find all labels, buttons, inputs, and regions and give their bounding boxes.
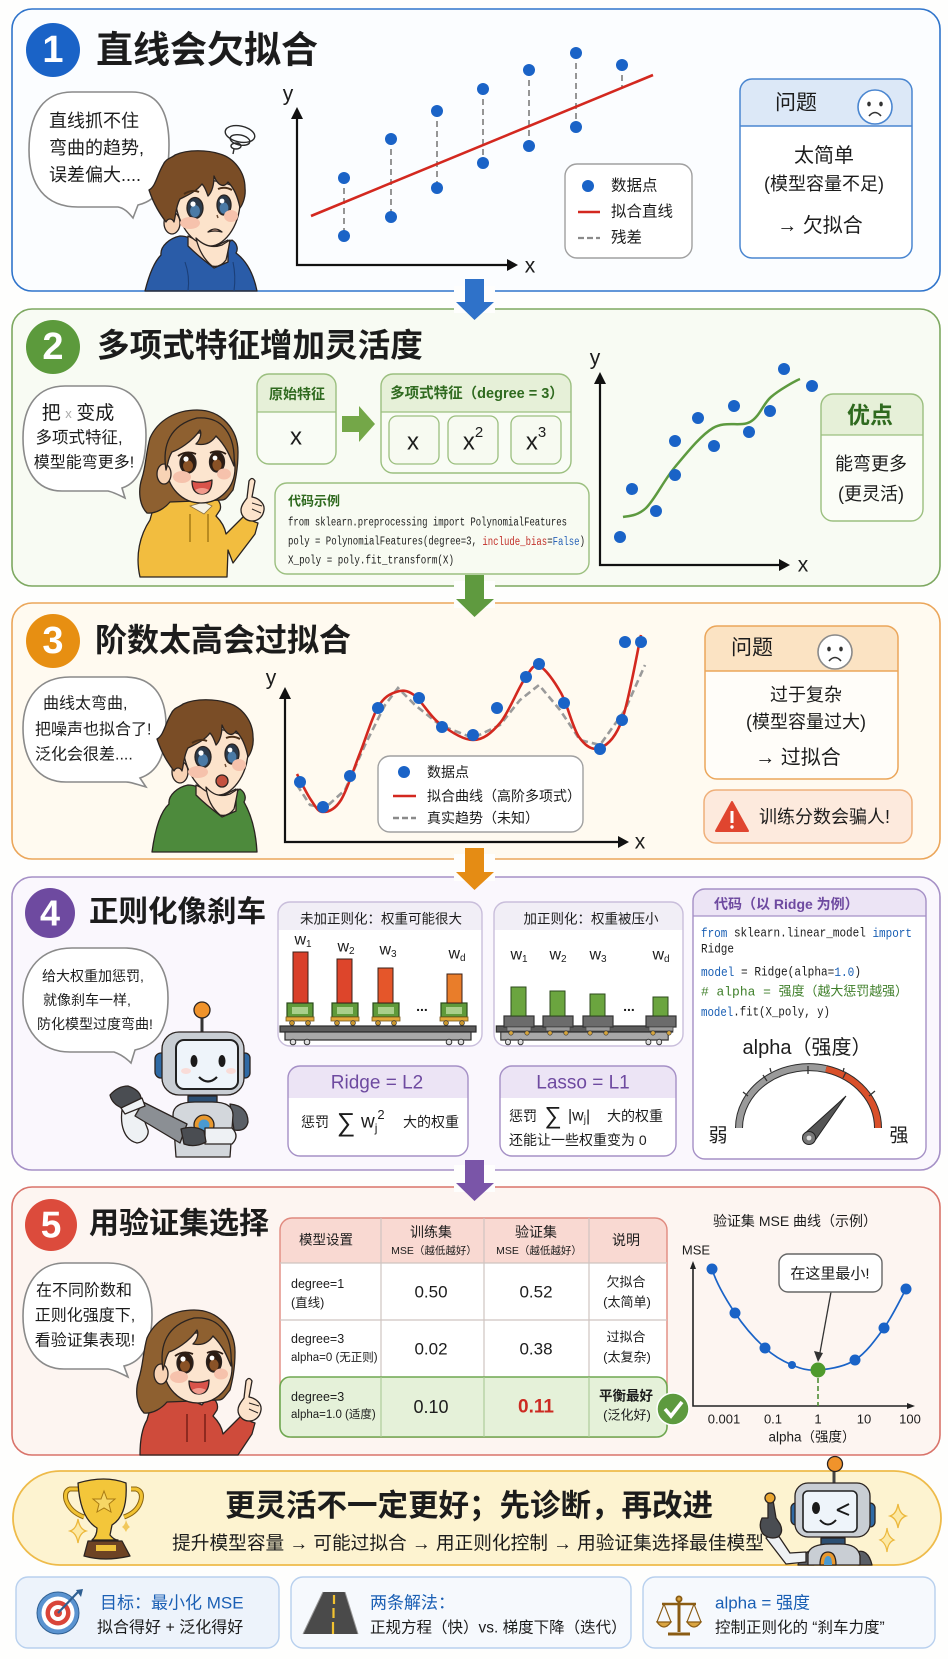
character: girl in red hoodie (137, 1310, 261, 1455)
overfit curve plot (266, 635, 647, 854)
arrow: panel 4 to 5 (454, 1160, 495, 1201)
comparison table: degree=1 (291, 1277, 344, 1291)
speech bubble 2: 把 x 变成 (42, 402, 114, 424)
overfit curve plot: y (266, 666, 277, 690)
icon: check mark (657, 1393, 689, 1425)
panel 4: regularization as a brake (12, 877, 940, 1170)
problem card 3: → 过拟合 (755, 746, 841, 769)
box: with regularization: 2 (561, 954, 567, 964)
speech bubble 3: 泛化会很差.... (35, 746, 133, 764)
speech bubble 1: 误差偏大.... (49, 165, 141, 185)
card: Ridge L2: 2 (377, 1106, 385, 1122)
MSE curve chart: MSE (682, 1242, 710, 1258)
badge 1: 1 (42, 29, 64, 71)
box: without regularization: ... (416, 998, 428, 1014)
benefit card: (更灵活) (838, 484, 904, 504)
card: Lasso L1: |w (568, 1108, 584, 1124)
card: Lasso L1 (500, 1066, 676, 1156)
badge 1 (26, 23, 80, 77)
badge 3 (26, 614, 80, 668)
card: goal: 拟合得好 + 泛化得好 (97, 1618, 243, 1636)
speech bubble 4: 给大权重加惩罚, (42, 968, 144, 984)
card: two solutions: 正规方程（快）vs. 梯度下降（迭代） (370, 1618, 627, 1636)
icon: trophy (66, 1479, 141, 1559)
problem card 3: (模型容量过大) (746, 712, 866, 732)
problem card 1 (740, 79, 912, 258)
box: polynomial features: 多项式特征（degree = 3） (390, 384, 564, 402)
comparison table: (直线) (291, 1296, 324, 1310)
box: with regularization: w (549, 946, 561, 964)
comparison table: 欠拟合 (606, 1274, 646, 1290)
warning callout (704, 790, 912, 843)
legend 1: 拟合直线 (611, 202, 673, 220)
comparison table: 0.52 (519, 1282, 553, 1302)
card: Ridge L2: 惩罚 (301, 1114, 329, 1130)
problem card 1: 太简单 (794, 144, 854, 167)
character: robot pulling brake lever (110, 1002, 250, 1157)
box: with regularization: w (589, 946, 601, 964)
box: original feature (257, 374, 336, 464)
card: Lasso L1: 惩罚 (509, 1108, 537, 1124)
comparison table: 过拟合 (606, 1330, 646, 1344)
box: polynomial features: x (526, 428, 538, 456)
box: without regularization: 3 (391, 948, 397, 960)
comparison table: 0.02 (414, 1340, 448, 1358)
heading 3: 阶数太高会过拟合 (95, 622, 351, 658)
card: goal (16, 1577, 279, 1648)
banner subtitle: 提升模型容量 → 可能过拟合 → 用正则化控制 → 用验证集选择最佳模型 (172, 1532, 764, 1554)
comparison table: 0.11 (518, 1396, 554, 1418)
card: alpha meaning: 控制正则化的 “刹车力度” (715, 1618, 885, 1636)
box: without regularization (278, 902, 482, 1046)
comparison table: (太复杂) (603, 1350, 651, 1364)
legend 3 (378, 756, 583, 832)
box: original feature: 原始特征 (269, 386, 325, 402)
legend 1: 残差 (611, 228, 642, 246)
comparison table: (太简单) (603, 1294, 651, 1310)
benefit card (821, 394, 923, 521)
speech bubble 5: 看验证集表现! (35, 1332, 135, 1350)
box: with regularization: w (652, 946, 664, 964)
code example: 代码示例 (288, 494, 340, 508)
character: girl in yellow hoodie (138, 410, 264, 577)
comparison table: MSE（越低越好） (496, 1244, 582, 1257)
box: without regularization: w (379, 942, 391, 958)
problem card 1: (模型容量不足) (764, 174, 884, 194)
box: with regularization: 1 (522, 954, 528, 964)
box: without regularization: 未加正则化：权重可能很大 (300, 910, 462, 926)
speech bubble 4 (23, 948, 168, 1063)
legend 1 (565, 164, 692, 258)
problem card 3: 过于复杂 (770, 685, 842, 705)
card: Ridge L2: ∑ (337, 1107, 355, 1137)
polynomial curve plot (590, 346, 818, 576)
arrow: panel 3 to 4 (454, 848, 495, 890)
comparison table: 训练集 (410, 1224, 452, 1240)
comparison table: (泛化好) (603, 1408, 651, 1422)
problem card 3: 问题 (731, 636, 773, 660)
legend 3: 拟合曲线（高阶多项式） (427, 788, 581, 804)
speech bubble 2: 多项式特征, (35, 428, 123, 447)
MSE curve chart: 100 (899, 1412, 921, 1426)
heading 1: 直线会欠拟合 (96, 30, 318, 70)
polynomial curve plot: x (798, 554, 809, 576)
panel 5: validation set selection (12, 1187, 940, 1455)
comparison table (280, 1218, 689, 1437)
box: with regularization: ... (623, 998, 635, 1014)
takeaway banner (13, 1456, 941, 1565)
card: alpha meaning: alpha = 强度 (715, 1594, 810, 1612)
arrow: to polynomial (342, 406, 375, 442)
heading 4: 正则化像刹车 (89, 896, 266, 928)
speech bubble 1: 直线抓不住 (49, 111, 139, 131)
character: confused boy in blue hoodie (145, 151, 257, 291)
legend 3: 真实趋势（未知） (427, 810, 539, 826)
code example: X_poly = poly.fit_transform(X) (288, 554, 454, 568)
box: polynomial features: x (407, 428, 419, 456)
card: Ridge L2: w (361, 1112, 375, 1132)
gauge: alpha strength (708, 1036, 909, 1146)
problem card 3 (705, 626, 898, 779)
comparison table: 模型设置 (299, 1232, 353, 1248)
box: with regularization: 加正则化：权重被压小 (524, 910, 659, 926)
box: polynomial features: 2 (475, 424, 483, 440)
card: Lasso L1: j (583, 1114, 586, 1126)
badge 5: 5 (41, 1204, 61, 1246)
box: polynomial features (381, 374, 571, 473)
box: original feature: x (290, 424, 302, 450)
code card with gauge: # alpha = 强度（越大惩罚越强） (701, 984, 908, 1000)
MSE curve chart: 验证集 MSE 曲线（示例） (713, 1213, 877, 1229)
scatter plot with fitted line: y (283, 82, 294, 106)
code card with gauge: model = Ridge(alpha=1.0) (701, 964, 861, 980)
card: two solutions (291, 1577, 631, 1648)
code card with gauge: 代码（以 Ridge 为例） (714, 896, 859, 912)
card: two solutions: 两条解法： (370, 1594, 455, 1612)
gauge: alpha strength: 弱 (708, 1126, 728, 1146)
MSE curve chart: alpha（强度） (768, 1430, 856, 1444)
callout: minimum here: 在这里最小! (790, 1266, 870, 1282)
card: Lasso L1: 大的权重 (607, 1108, 663, 1124)
benefit card: 优点 (847, 402, 893, 428)
speech bubble 1: 弯曲的趋势, (49, 138, 144, 158)
box: with regularization: d (664, 954, 670, 964)
speech bubble 5: 正则化强度下, (35, 1306, 135, 1324)
character: worried boy in green hoodie (152, 700, 257, 852)
arrow: panel 1 to 2 (454, 279, 495, 320)
scatter plot with fitted line: x (525, 254, 536, 278)
code card with gauge: from sklearn.linear_model import (701, 926, 912, 940)
speech bubble 3 (23, 677, 166, 787)
character: winking robot (760, 1456, 875, 1565)
badge 4 (25, 888, 75, 938)
box: without regularization: d (460, 952, 466, 964)
code card with gauge: model.fit(X_poly, y) (701, 1004, 830, 1020)
badge 3: 3 (42, 620, 64, 662)
speech bubble 3: 把噪声也拟合了! (35, 720, 151, 738)
code example (275, 483, 589, 574)
legend 1: 数据点 (611, 176, 658, 194)
problem card 1: → 欠拟合 (777, 214, 863, 237)
comparison table: degree=3 (291, 1332, 344, 1346)
MSE curve chart (682, 1213, 921, 1444)
comparison table: MSE（越低越好） (391, 1244, 477, 1257)
comparison table: 0.50 (414, 1282, 448, 1302)
icon: road (303, 1592, 358, 1634)
comparison table: degree=3 (291, 1390, 344, 1404)
card: Lasso L1: Lasso = L1 (536, 1072, 630, 1094)
problem card 1: 问题 (775, 92, 817, 114)
comparison table: 说明 (612, 1232, 640, 1248)
overfit curve plot: x (635, 830, 646, 854)
badge 2: 2 (42, 326, 64, 368)
speech bubble 2: 模型能弯更多! (34, 454, 134, 472)
box: without regularization: w (448, 946, 460, 962)
panel 2: polynomial features (12, 309, 940, 586)
card: alpha meaning (643, 1577, 935, 1648)
icon: balance scales (657, 1596, 701, 1634)
speech bubble 5: 在不同阶数和 (36, 1282, 132, 1300)
code card with gauge (693, 889, 926, 1159)
MSE curve chart: 1 (814, 1412, 822, 1426)
card: Ridge L2 (288, 1066, 468, 1156)
gauge: alpha strength: alpha（强度） (743, 1036, 871, 1059)
box: without regularization: w (337, 938, 349, 956)
comparison table: 0.10 (413, 1397, 449, 1417)
benefit card: 能弯更多 (835, 454, 907, 474)
comparison table: alpha=0 (无正则) (291, 1351, 378, 1364)
box: with regularization: 3 (601, 954, 607, 964)
MSE curve chart: 10 (857, 1412, 871, 1426)
speech bubble 4: 防化模型过度弯曲! (37, 1016, 153, 1032)
gauge: alpha strength: 强 (889, 1126, 909, 1146)
scatter plot with fitted line (283, 47, 653, 278)
sparkles near robot (880, 1504, 906, 1552)
comparison table: 平衡最好 (599, 1388, 653, 1404)
speech bubble 3: 曲线太弯曲, (43, 694, 127, 712)
table row: best model highlight (280, 1377, 667, 1437)
icon: target (37, 1589, 83, 1634)
comparison table: 0.38 (519, 1340, 553, 1358)
card: Lasso L1: | (586, 1108, 590, 1124)
box: without regularization: w (294, 932, 306, 948)
polynomial curve plot: y (590, 346, 601, 370)
MSE curve chart: 0.001 (708, 1412, 740, 1426)
box: without regularization: 1 (306, 938, 312, 950)
arrow: panel 2 to 3 (454, 575, 495, 617)
heading 5: 用验证集选择 (89, 1208, 269, 1240)
code example: poly = PolynomialFeatures(degree=3, include_bias=False) (288, 536, 585, 548)
card: Ridge L2: Ridge = L2 (331, 1072, 423, 1094)
box: with regularization: w (510, 946, 522, 964)
icon: confusion swirl (224, 123, 256, 154)
card: Lasso L1: ∑ (544, 1102, 562, 1130)
speech bubble 4: 就像刹车一样, (43, 992, 131, 1008)
card: Lasso L1: 还能让一些权重变为 0 (509, 1132, 647, 1148)
card: goal: 目标：最小化 MSE (100, 1594, 244, 1612)
card: Ridge L2: 大的权重 (403, 1114, 459, 1130)
badge 4: 4 (40, 892, 60, 934)
badge 5 (25, 1199, 77, 1251)
box: polynomial features: 3 (538, 424, 546, 440)
comparison table: 验证集 (515, 1224, 557, 1240)
callout: minimum here (779, 1254, 882, 1362)
speech bubble 2 (23, 386, 146, 498)
speech bubble 1 (29, 92, 169, 218)
warning callout: 训练分数会骗人! (759, 807, 890, 827)
banner title: 更灵活不一定更好；先诊断，再改进 (225, 1489, 713, 1523)
box: without regularization: 2 (349, 946, 355, 956)
box: polynomial features: x (463, 428, 475, 456)
box: with regularization (494, 902, 683, 1046)
comparison table: alpha=1.0 (适度) (291, 1407, 376, 1421)
panel 3: overfitting (12, 603, 940, 859)
speech bubble 5 (23, 1263, 152, 1377)
heading 2: 多项式特征增加灵活度 (97, 326, 423, 364)
card: Ridge L2: j (374, 1121, 377, 1135)
legend 3: 数据点 (427, 764, 469, 780)
badge 2 (26, 320, 80, 374)
panel 1: straight line underfits (12, 9, 940, 291)
code example: from sklearn.preprocessing import PolynomialFeatures (288, 516, 567, 530)
MSE curve chart: 0.1 (764, 1412, 782, 1426)
code card with gauge: Ridge (701, 942, 734, 956)
